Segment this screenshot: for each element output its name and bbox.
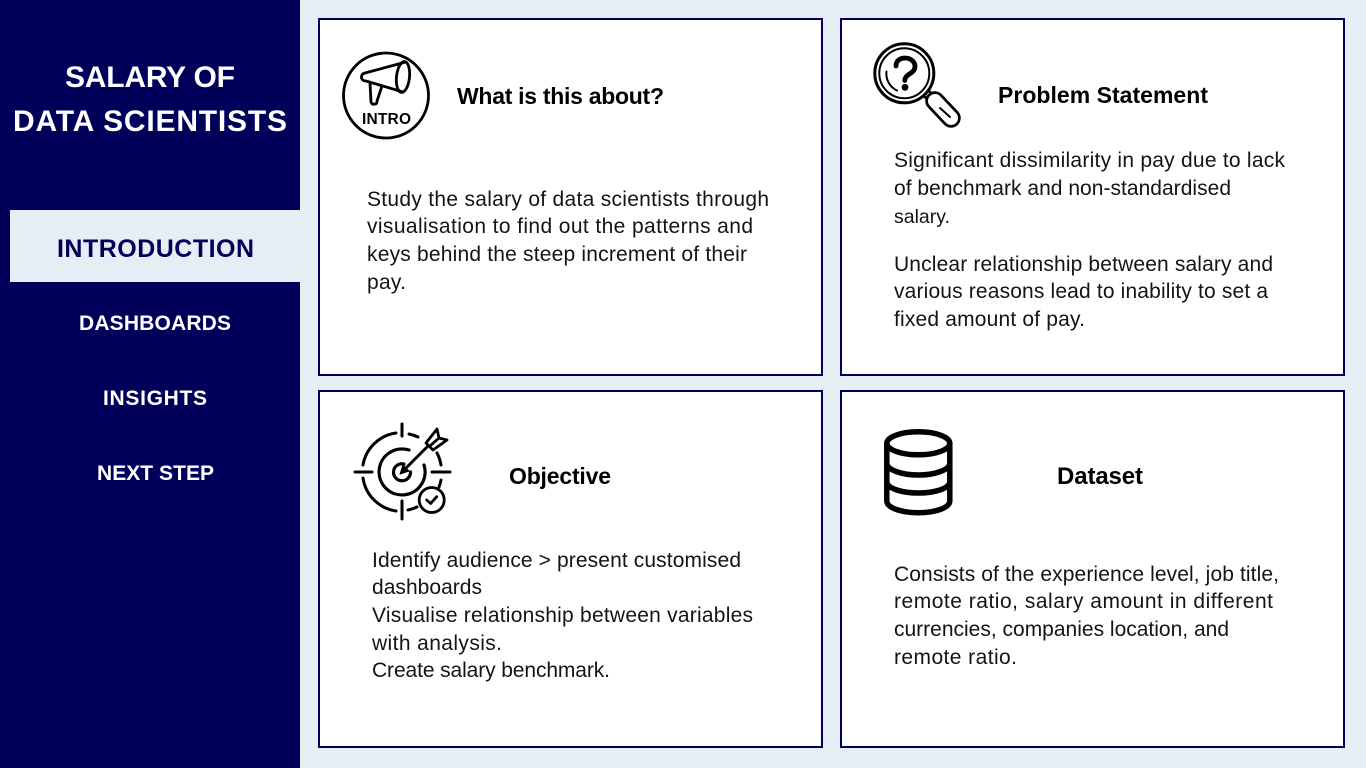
active nav item: introduction	[10, 210, 300, 282]
title	[13, 61, 287, 138]
body text: fixed amount of pay.	[894, 308, 1085, 331]
panel: what is this about	[319, 19, 822, 375]
body text: currencies, companies location, and	[894, 618, 1229, 641]
body text: visualisation to find out the patterns and	[367, 215, 753, 238]
heading: Dataset	[1057, 463, 1143, 490]
body text: dashboards	[372, 576, 482, 599]
icon: intro megaphone: INTRO	[362, 111, 411, 128]
body text: Create salary benchmark.	[372, 659, 610, 682]
body text: Unclear relationship between salary and	[894, 253, 1273, 276]
body text: Study the salary of data scientists through	[367, 188, 769, 211]
body text: Identify audience > present customised	[372, 549, 741, 572]
active nav item: introduction: INTRODUCTION	[57, 235, 254, 263]
title: SALARY OF	[65, 61, 235, 94]
panel: dataset	[841, 391, 1344, 747]
icon: database cylinder	[887, 432, 950, 513]
icon: intro megaphone	[344, 53, 428, 138]
body text	[894, 149, 1286, 331]
body text: remote ratio, salary amount in different	[894, 590, 1273, 613]
nav item: dashboards: DASHBOARDS	[79, 312, 231, 335]
title: DATA SCIENTISTS	[13, 105, 287, 138]
panel: problem statement	[841, 19, 1344, 375]
body text: Visualise relationship between variables	[372, 604, 753, 627]
heading: What is this about?	[457, 83, 664, 109]
body text	[367, 188, 769, 294]
body text: Significant dissimilarity in pay due to lack	[894, 149, 1286, 172]
nav item: insights: INSIGHTS	[103, 387, 207, 410]
panel: objective	[319, 391, 822, 747]
heading: Problem Statement	[998, 82, 1208, 108]
body text: with analysis.	[371, 632, 502, 655]
icon: target with arrow	[355, 424, 450, 519]
sidebar navigation	[0, 0, 300, 768]
body text: various reasons lead to inability to set a	[894, 280, 1268, 303]
body text: pay.	[367, 271, 406, 294]
body text: Consists of the experience level, job title,	[894, 563, 1279, 586]
body text: remote ratio.	[894, 646, 1017, 669]
nav item: next step: NEXT STEP	[97, 462, 214, 485]
body text	[894, 563, 1279, 669]
body text: of benchmark and non-standardised	[894, 177, 1231, 200]
heading: Objective	[509, 463, 611, 489]
body text	[371, 549, 753, 682]
body text: keys behind the steep increment of their	[367, 243, 747, 266]
icon: magnifier with question mark	[875, 44, 951, 118]
body text: salary.	[894, 206, 950, 228]
